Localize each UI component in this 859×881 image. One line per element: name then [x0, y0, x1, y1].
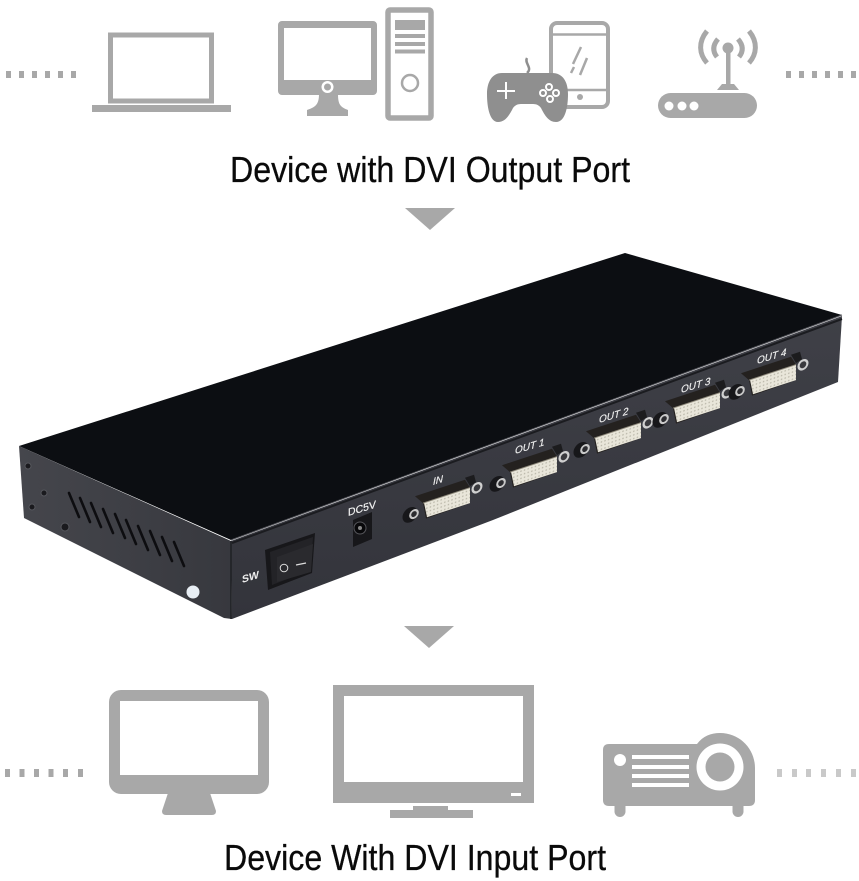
- port: IN: [402, 472, 482, 526]
- arrow: bottom down: [404, 626, 454, 648]
- port: OUT 4: OUT 4: [757, 347, 787, 367]
- side screws: [25, 463, 69, 531]
- device top face: [19, 253, 842, 540]
- port: OUT 1: [490, 437, 570, 495]
- icon: monitor: [109, 690, 269, 815]
- power jack: [353, 512, 372, 547]
- heading: input devices: Device With DVI Input Port: [224, 837, 606, 878]
- dotted line: bottom right: [777, 769, 856, 777]
- icon: smartphone: [551, 23, 608, 107]
- dotted line: bottom left: [5, 769, 83, 777]
- device front face: [231, 316, 842, 619]
- label: SW: SW: [242, 569, 260, 586]
- icon: wireless router: [658, 31, 757, 118]
- port: OUT 2: OUT 2: [599, 406, 629, 426]
- icon: projector: [603, 733, 755, 817]
- label: DC5V: DC5V: [348, 499, 377, 519]
- icon: laptop: [92, 35, 231, 112]
- port: OUT 2: [574, 406, 654, 461]
- port: OUT 3: OUT 3: [681, 376, 711, 396]
- DVI splitter device: [19, 253, 842, 619]
- power switch: [265, 533, 315, 590]
- vent slots: [69, 493, 184, 566]
- sticker: [186, 586, 200, 598]
- device left side face: [19, 446, 232, 619]
- port: OUT 1: OUT 1: [515, 437, 544, 457]
- icon: TV: [333, 685, 534, 818]
- icon: desktop monitor: [278, 21, 377, 116]
- port: OUT 3: [652, 376, 732, 431]
- arrow: top down: [405, 208, 455, 230]
- dotted line: top left: [6, 71, 76, 78]
- icon: PC tower: [388, 10, 431, 118]
- heading: output devices: Device with DVI Output Port: [230, 149, 630, 190]
- port: IN: IN: [433, 474, 444, 488]
- dotted line: top right: [786, 71, 856, 78]
- port: OUT 4: [728, 347, 808, 403]
- icon: game controller: [487, 58, 568, 122]
